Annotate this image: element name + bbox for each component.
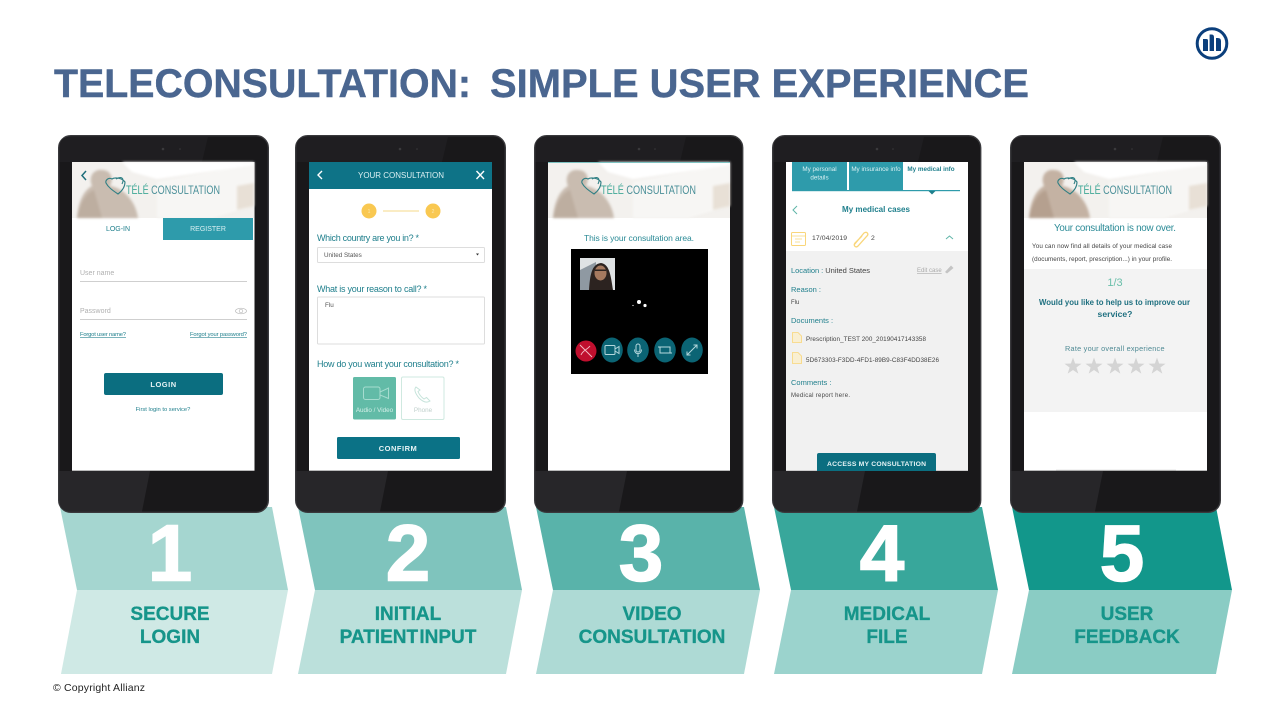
- step 5 chevron: FEEDBACK: [1074, 627, 1180, 648]
- tablet 5: user feedback screen: [1011, 136, 1220, 512]
- selfie thumbnail: [580, 258, 615, 290]
- rating stars: [1064, 358, 1166, 374]
- case details panel: Prescription_TEST 200_20190417143358: [806, 336, 926, 343]
- step indicator: 2: [432, 209, 435, 215]
- step 3 chevron: CONSULTATION: [579, 627, 725, 648]
- case details panel: 5D673303-F3DD-4FD1-89B9-C83F4DD38E26: [806, 357, 939, 364]
- case details panel: Flu: [791, 300, 799, 306]
- login form: Forgot your password?: [190, 332, 248, 338]
- login form: Forgot user name?: [80, 332, 127, 338]
- step 3 chevron: [536, 507, 760, 674]
- step 5 chevron: USER: [1101, 604, 1154, 625]
- medical cases heading: My medical cases: [842, 204, 910, 214]
- step 1 chevron: 1: [148, 508, 192, 598]
- step 4 chevron: 4: [860, 508, 905, 598]
- profile tabs: [792, 162, 960, 194]
- banner: Télé Consultation: TÉLÉ CONSULTATION: [126, 184, 220, 197]
- feedback panel: Would you like to help us to improve our: [1039, 297, 1191, 307]
- feedback panel: 1/3: [1107, 277, 1123, 289]
- profile tabs: My insurance info: [851, 166, 901, 173]
- profile tabs: details: [810, 174, 829, 182]
- login form: Password: [80, 308, 111, 315]
- profile tabs: My medical info: [907, 166, 955, 173]
- country field: Which country are you in? *: [317, 233, 419, 243]
- consultation over message: (documents, report, prescription...) in your profile.: [1032, 256, 1172, 263]
- video window: [571, 249, 708, 374]
- title: SIMPLE USER EXPERIENCE: [490, 62, 1029, 106]
- tablet 2: initial patient input screen: [296, 136, 505, 512]
- step indicator: 1: [368, 209, 371, 215]
- case details panel: Comments :: [791, 378, 831, 387]
- country field: United States: [324, 252, 362, 259]
- medical cases heading: [793, 204, 910, 214]
- access consultation button: ACCESS MY CONSULTATION: [827, 461, 926, 468]
- step 5 chevron: [1012, 507, 1232, 674]
- case details panel: Reason :: [791, 285, 821, 294]
- step 5 chevron: 5: [1100, 508, 1144, 598]
- consultation over message: Your consultation is now over.: [1054, 223, 1176, 234]
- tabs: REGISTER: [190, 226, 226, 233]
- step 2 chevron: INITIAL: [375, 604, 442, 625]
- step 4 chevron: FILE: [866, 627, 908, 648]
- feedback panel: service?: [1098, 309, 1132, 319]
- icon: Allianz logo: [1197, 29, 1227, 58]
- profile tabs: My personal: [802, 166, 837, 173]
- case row: 17/04/2019: [812, 235, 847, 242]
- country field: [317, 233, 484, 262]
- step 2 chevron: 2: [386, 508, 430, 598]
- login form: [80, 270, 248, 338]
- confirm button: [337, 437, 460, 459]
- tablet 4: medical file screen: [773, 136, 981, 512]
- reason field: [317, 284, 484, 344]
- consultation type: Phone: [414, 407, 433, 414]
- banner: Télé Consultation: TÉLÉ CONSULTATION: [1078, 184, 1172, 197]
- tabs: [106, 218, 253, 240]
- reason field: Flu: [325, 302, 334, 309]
- step 1 chevron: SECURE: [130, 604, 210, 625]
- step 4 chevron: [774, 507, 998, 674]
- loading dots: [632, 300, 647, 307]
- login button: LOGIN: [150, 380, 177, 389]
- step 3 chevron: VIDEO: [622, 604, 682, 625]
- step 2 chevron: PATIENT INPUT: [340, 627, 477, 648]
- consultation type: [317, 359, 459, 420]
- consultation type: How do you want your consultation? *: [317, 359, 459, 369]
- step 4 chevron: MEDICAL: [844, 604, 931, 625]
- banner: Télé Consultation: [1024, 162, 1207, 218]
- consultation type: Audio / Video: [356, 407, 394, 414]
- header bar: YOUR CONSULTATION: [358, 170, 444, 180]
- case details panel: [786, 251, 968, 471]
- case details panel: Medical report here.: [791, 393, 850, 399]
- consultation over message: You can now find all details of your medical case: [1032, 243, 1172, 250]
- feedback panel: Rate your overall experience: [1065, 344, 1164, 353]
- step indicator: [362, 204, 440, 218]
- title: [54, 62, 1029, 106]
- first login link: First login to service?: [136, 407, 191, 413]
- access consultation button: [817, 453, 936, 471]
- consultation area heading: This is your consultation area.: [584, 233, 694, 243]
- consultation over message: [1032, 223, 1176, 263]
- title: TELECONSULTATION:: [54, 62, 471, 106]
- case details panel: Documents :: [791, 316, 833, 325]
- case row: 2: [871, 235, 875, 242]
- tablet 1: secure login screen: [59, 136, 268, 512]
- banner: Télé Consultation: [548, 162, 730, 218]
- step 3 chevron: 3: [619, 508, 663, 598]
- banner: Télé Consultation: [72, 162, 254, 218]
- feedback panel: [1024, 269, 1207, 412]
- call controls: [576, 338, 703, 362]
- confirm button: CONFIRM: [379, 444, 417, 453]
- banner: Télé Consultation: TÉLÉ CONSULTATION: [601, 184, 696, 197]
- case row: [792, 232, 953, 247]
- reason field: What is your reason to call? *: [317, 284, 427, 294]
- step 1 chevron: LOGIN: [140, 627, 200, 648]
- case details panel: Location : United States: [791, 266, 870, 275]
- copyright footer: © Copyright Allianz: [53, 682, 145, 694]
- tabs: LOG-IN: [106, 226, 130, 233]
- login button: [104, 373, 223, 395]
- step 2 chevron: [298, 507, 522, 674]
- tablet 3: video consultation screen: [535, 136, 743, 512]
- login form: User name: [80, 270, 114, 277]
- case details panel: Edit case: [917, 268, 942, 274]
- step 1 chevron: [60, 507, 288, 674]
- header bar: [309, 162, 492, 189]
